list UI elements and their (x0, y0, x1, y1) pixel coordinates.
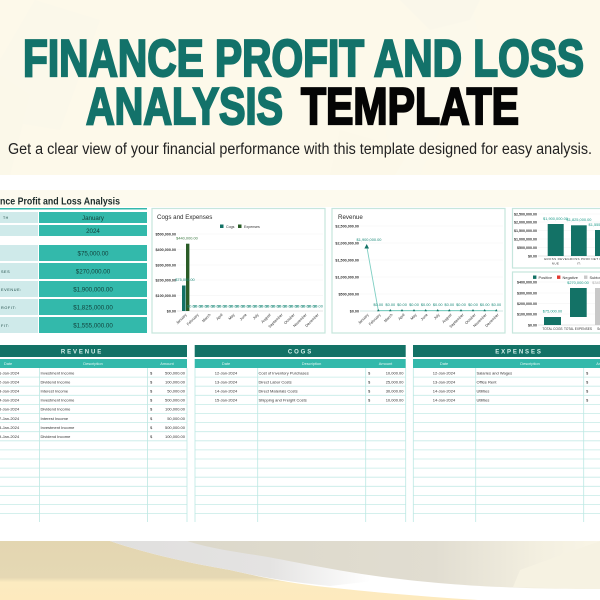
revenue rows: 100,000.00 (165, 407, 186, 412)
month labels: February (368, 313, 382, 326)
revenue rows: Interest Income (40, 416, 69, 421)
legend: Negative (562, 275, 578, 280)
month labels: May (228, 313, 236, 321)
data labels: $0.00 (265, 304, 276, 308)
data labels: $0.00 (409, 302, 420, 307)
KPI: total expenses: $270,000.00 (76, 268, 111, 276)
revenue rows: 50,000.00 (167, 416, 186, 421)
KPI: total expenses: SES (1, 270, 10, 274)
month labels: August (261, 312, 272, 324)
table: expenses: EXPENSES (495, 350, 543, 356)
title (23, 30, 584, 136)
cogs rows: $ (368, 379, 371, 384)
category labels (544, 257, 600, 266)
bars (182, 244, 189, 311)
category labels: TOTAL COGS (542, 327, 563, 331)
data labels: $0.00 (253, 304, 264, 308)
dashboard title strip: nce Profit and Loss Analysis (0, 196, 120, 208)
table: expenses: Date (440, 361, 448, 366)
y axis labels: $0.00 (167, 310, 176, 314)
dashboard title strip (0, 190, 600, 210)
table: cogs: Amount (379, 361, 393, 366)
revenue rows: $ (150, 379, 153, 384)
category labels: IT: (577, 262, 581, 266)
y axis labels: $500,000.00 (155, 232, 176, 236)
month labels: July (433, 313, 441, 320)
data labels (357, 237, 502, 307)
data labels: $0.00 (295, 304, 306, 308)
expenses rows: Utilities (476, 398, 489, 403)
y axis labels: $2,000,000.00 (514, 220, 537, 224)
data labels: $1,900,000.00 (543, 216, 569, 221)
data labels: $0.00 (259, 304, 270, 308)
KPI: gross revenue: $1,900,000.00 (73, 286, 113, 294)
data labels: $0.00 (313, 304, 324, 308)
data labels: $0.00 (468, 302, 479, 307)
KPI: total cogs (0, 245, 147, 261)
data labels (175, 236, 324, 308)
data labels: $0.00 (229, 304, 240, 308)
expenses rows: $ (586, 379, 589, 384)
data labels: $0.00 (480, 302, 490, 307)
selector: month: January (82, 215, 105, 222)
selector: year: 2024 (86, 228, 100, 235)
table: expenses: Description (520, 361, 540, 366)
month labels: June (420, 313, 429, 322)
expenses rows: $ (586, 388, 589, 394)
table: expenses (413, 345, 600, 522)
revenue rows: Investment Income (40, 370, 75, 375)
table: revenue: Description (83, 361, 103, 366)
month labels: June (239, 313, 248, 322)
data labels: $0.00 (247, 304, 258, 308)
data labels: $0.00 (397, 302, 408, 307)
KPI: net profit: $1,555,000.00 (73, 322, 113, 330)
bars (544, 288, 600, 325)
month labels: January (175, 313, 188, 325)
selector: month (0, 212, 147, 223)
revenue rows: $ (150, 370, 153, 375)
cogs rows: $ (368, 370, 371, 375)
month labels: February (186, 313, 200, 326)
data labels: $0.00 (223, 304, 234, 308)
expenses rows (433, 370, 589, 403)
data labels: $0.00 (235, 304, 246, 308)
month labels (357, 312, 500, 329)
panel: waterfall chart (512, 272, 600, 333)
y axis labels: $100,000.00 (155, 294, 176, 298)
table: cogs: Description (302, 361, 321, 366)
KPI: total cogs: $75,000.00 (78, 250, 109, 258)
KPI: gross profit: $1,825,000.00 (73, 304, 113, 312)
data labels: $0.00 (385, 302, 396, 307)
cogs rows: 15-Jan-2024 (215, 398, 238, 403)
cogs rows: 25,000.00 (386, 379, 404, 384)
cogs rows: $ (368, 388, 371, 394)
legend: Cogs (226, 225, 235, 229)
revenue rows: Dividend Income (40, 434, 71, 439)
revenue rows: $ (150, 388, 153, 394)
revenue rows: Dividend Income (40, 379, 71, 384)
cogs rows: 10,000.00 (386, 398, 404, 403)
KPI: gross revenue (0, 281, 147, 297)
revenue rows: 500,000.00 (165, 398, 186, 403)
category labels: TOTAL EXPENSES (564, 327, 592, 331)
data labels: $0.00 (193, 304, 204, 308)
month labels: January (357, 313, 370, 325)
table: revenue: Amount (160, 361, 175, 366)
y axis labels: $1,500,000.00 (514, 229, 537, 233)
expenses rows: 13-Jan-2024 (433, 379, 456, 384)
KPI: gross profit (0, 299, 147, 315)
revenue rows: 50,000.00 (167, 388, 186, 394)
expenses rows: 14-Jan-2024 (433, 398, 456, 403)
footer background (0, 541, 600, 600)
panel: profit bar chart (512, 208, 600, 268)
data labels: $75,000.00 (543, 308, 563, 314)
expenses rows: Utilities (476, 388, 489, 394)
table: cogs: Date (222, 361, 230, 366)
revenue rows: 500,000.00 (165, 370, 186, 375)
KPI: net profit: FIT: (1, 324, 10, 328)
expenses rows: 14-Jan-2024 (433, 388, 456, 394)
month labels: October (283, 312, 296, 325)
y axis labels: $2,500,000.00 (335, 224, 359, 228)
month labels: August (442, 312, 453, 324)
month labels: December (484, 312, 500, 328)
panel: KPI summary (0, 212, 147, 333)
cogs rows: 30,000.00 (386, 388, 404, 394)
panel: cogs and expenses chart (152, 208, 325, 333)
expenses rows: Office Rent (476, 379, 497, 384)
table: revenue: Date (4, 361, 12, 366)
cogs rows: 14-Jan-2024 (215, 388, 238, 394)
month labels: May (410, 313, 418, 321)
revenue rows: 100,000.00 (165, 434, 186, 439)
bars (548, 224, 600, 256)
data labels: $0.00 (283, 304, 294, 308)
expenses rows: $ (586, 398, 589, 403)
data labels: $0.00 (205, 304, 216, 308)
revenue rows: Dividend Income (40, 407, 71, 412)
data labels: $1,825,000.00 (567, 217, 592, 222)
cogs rows: Shipping and Freight Costs (258, 398, 307, 403)
y axis labels: $1,000,000.00 (335, 276, 359, 280)
y axis labels (514, 212, 537, 258)
y axis labels: $2,000,000.00 (335, 242, 359, 246)
panel: revenue chart (332, 208, 505, 333)
expenses rows: 12-Jan-2024 (433, 370, 456, 375)
KPI: total expenses (0, 263, 147, 279)
revenue rows: 100,000.00 (165, 379, 186, 384)
data labels: $0.00 (187, 304, 198, 308)
month labels: April (397, 313, 406, 321)
category labels (542, 327, 600, 331)
data labels: $0.00 (421, 302, 431, 307)
title: TEMPLATE (301, 78, 519, 136)
data labels: $75,000.00 (175, 277, 196, 282)
cogs rows: Direct Materials Costs (258, 388, 298, 394)
line series (364, 244, 498, 311)
data labels: $0.00 (211, 304, 222, 308)
y axis labels: $300,000.00 (517, 291, 537, 295)
month labels: September (449, 312, 465, 329)
revenue rows: Investment Income (40, 425, 75, 430)
y axis labels: $500,000.00 (517, 246, 537, 250)
cogs rows: Cost of Inventory Purchases (258, 370, 309, 375)
month labels: November (472, 312, 488, 328)
expenses rows: Salaries and Wages (476, 370, 512, 375)
data labels (543, 216, 600, 227)
category labels: GROSS PROF (567, 257, 591, 261)
chart title: Revenue (338, 214, 363, 221)
revenue rows: 500,000.00 (165, 425, 186, 430)
data labels: $0.00 (217, 304, 228, 308)
category labels: NUE (552, 262, 559, 266)
revenue rows: $ (150, 398, 153, 403)
revenue rows: Investment Income (40, 398, 75, 403)
KPI: gross revenue: EVENUE: (1, 288, 22, 292)
y axis labels: $0.00 (528, 323, 537, 327)
cogs rows: 10,000.00 (386, 370, 404, 375)
cogs rows: Direct Labor Costs (258, 379, 292, 384)
y axis labels: $300,000.00 (155, 264, 176, 268)
data labels (543, 280, 600, 314)
month labels: September (268, 312, 284, 329)
month labels: April (215, 313, 224, 321)
y axis labels (335, 224, 359, 314)
data labels: $270,000.00 (567, 280, 590, 285)
y axis labels: $1,500,000.00 (335, 258, 359, 262)
revenue rows: Interest Income (40, 388, 69, 394)
data labels: $0.00 (307, 304, 318, 308)
data labels: $0.00 (433, 302, 443, 307)
y axis labels: $0.00 (528, 254, 537, 258)
legend (533, 275, 600, 280)
month labels: July (252, 313, 260, 320)
dashboard sheet background (0, 175, 600, 541)
data labels: $440,000.00 (176, 236, 199, 240)
data labels: $1,900,000.00 (357, 237, 382, 242)
data labels: $0.00 (373, 302, 384, 307)
revenue rows: $ (150, 434, 153, 439)
month labels: March (383, 313, 394, 323)
KPI: net profit (0, 317, 147, 333)
title: ANALYSIS (86, 78, 283, 136)
table: cogs (195, 345, 406, 522)
expenses rows: $ (586, 370, 589, 375)
chart title: Cogs and Expenses (157, 214, 212, 221)
cogs rows: 13-Jan-2024 (215, 379, 238, 384)
selector: month: TH (3, 216, 9, 220)
data labels: $0.00 (444, 302, 455, 307)
cogs rows (215, 370, 404, 403)
month labels: March (201, 313, 212, 323)
data labels: $0.00 (456, 302, 467, 307)
table: cogs: COGS (288, 350, 313, 356)
cogs rows: $ (368, 398, 371, 403)
y axis labels: $100,000.00 (517, 312, 537, 316)
y axis labels: $200,000.00 (155, 278, 176, 282)
header background (0, 0, 600, 175)
legend: Expenses (244, 225, 260, 229)
y axis labels: $400,000.00 (155, 248, 176, 252)
y axis labels (517, 280, 537, 327)
KPI: gross profit: ROFIT: (1, 306, 17, 310)
data labels: $0.00 (241, 304, 252, 308)
data labels: $0.00 (199, 304, 210, 308)
y axis labels (155, 232, 176, 314)
month labels: November (292, 312, 308, 328)
month labels: October (464, 312, 477, 325)
category labels: GROSS REVE (544, 257, 567, 261)
revenue rows (0, 370, 186, 439)
month labels (175, 312, 320, 329)
legend: Positive (538, 275, 552, 280)
data labels: $0.00 (301, 304, 312, 308)
y axis labels: $1,000,000.00 (514, 237, 537, 241)
y axis labels: $200,000.00 (517, 302, 537, 306)
y axis labels: $500,000.00 (338, 292, 359, 296)
selector: year (0, 225, 147, 236)
data labels: $0.00 (271, 304, 282, 308)
legend (220, 224, 260, 229)
y axis labels: $400,000.00 (517, 280, 537, 284)
data labels: $0.00 (277, 304, 288, 308)
data labels: $0.00 (491, 302, 502, 307)
data labels: $0.00 (289, 304, 300, 308)
table: revenue (0, 345, 187, 522)
revenue rows: $ (150, 407, 153, 412)
revenue rows: $ (150, 416, 153, 421)
table: revenue: REVENUE (61, 350, 103, 356)
revenue rows: $ (150, 425, 153, 430)
month labels: December (304, 312, 320, 328)
y axis labels: $0.00 (350, 310, 359, 314)
y axis labels: $2,500,000.00 (514, 212, 537, 216)
cogs rows: 12-Jan-2024 (215, 370, 238, 375)
